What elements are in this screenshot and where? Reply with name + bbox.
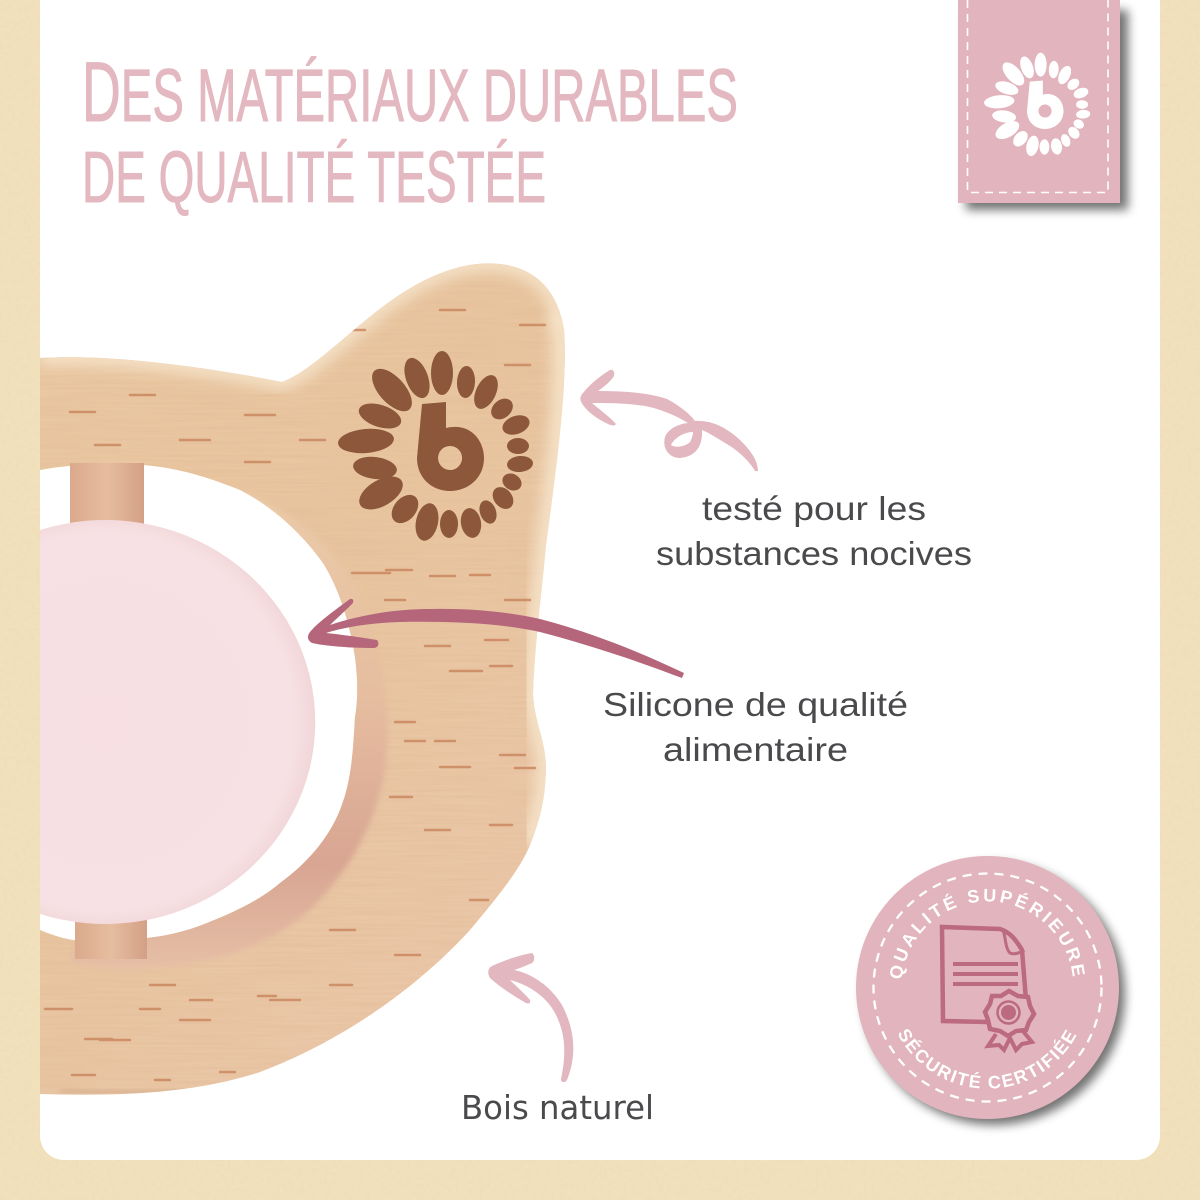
title: DES MATÉRIAUX DURABLES [82,45,738,139]
engraved sun logo on wood [337,351,534,543]
badge text: SÉCURITÉ CERTIFIÉE [898,1029,1076,1088]
product: wooden cat-shaped rattle [30,250,570,1110]
label: food-grade silicone [603,686,908,768]
icon: white sun logo [983,53,1091,157]
label: food-grade silicone: alimentaire [663,731,848,768]
arrow: to engraved logo [580,370,758,471]
wooden post bottom [75,920,147,959]
wooden frame [30,250,570,1110]
brand tag with logo [958,0,1128,210]
label: tested for harmful substances: testé pour les [702,490,926,527]
title [82,45,738,218]
arrow: to silicone ball [308,599,684,678]
label: tested for harmful substances: substances nocives [656,535,972,572]
badge text [890,888,1085,1088]
badge text: QUALITÉ SUPÉRIEURE [890,888,1085,978]
label: natural wood: Bois naturel [461,1088,654,1127]
silicone ball [40,520,315,924]
label: food-grade silicone: Silicone de qualité [603,686,908,723]
icon: certificate with rosette [942,927,1034,1050]
wooden post top [70,463,144,525]
badge: quality seal [856,856,1132,1132]
title: DE QUALITÉ TESTÉE [82,138,546,218]
wood grain flecks [45,310,545,1080]
label: tested for harmful substances [656,490,972,572]
arrow: to natural wood [488,953,573,1082]
